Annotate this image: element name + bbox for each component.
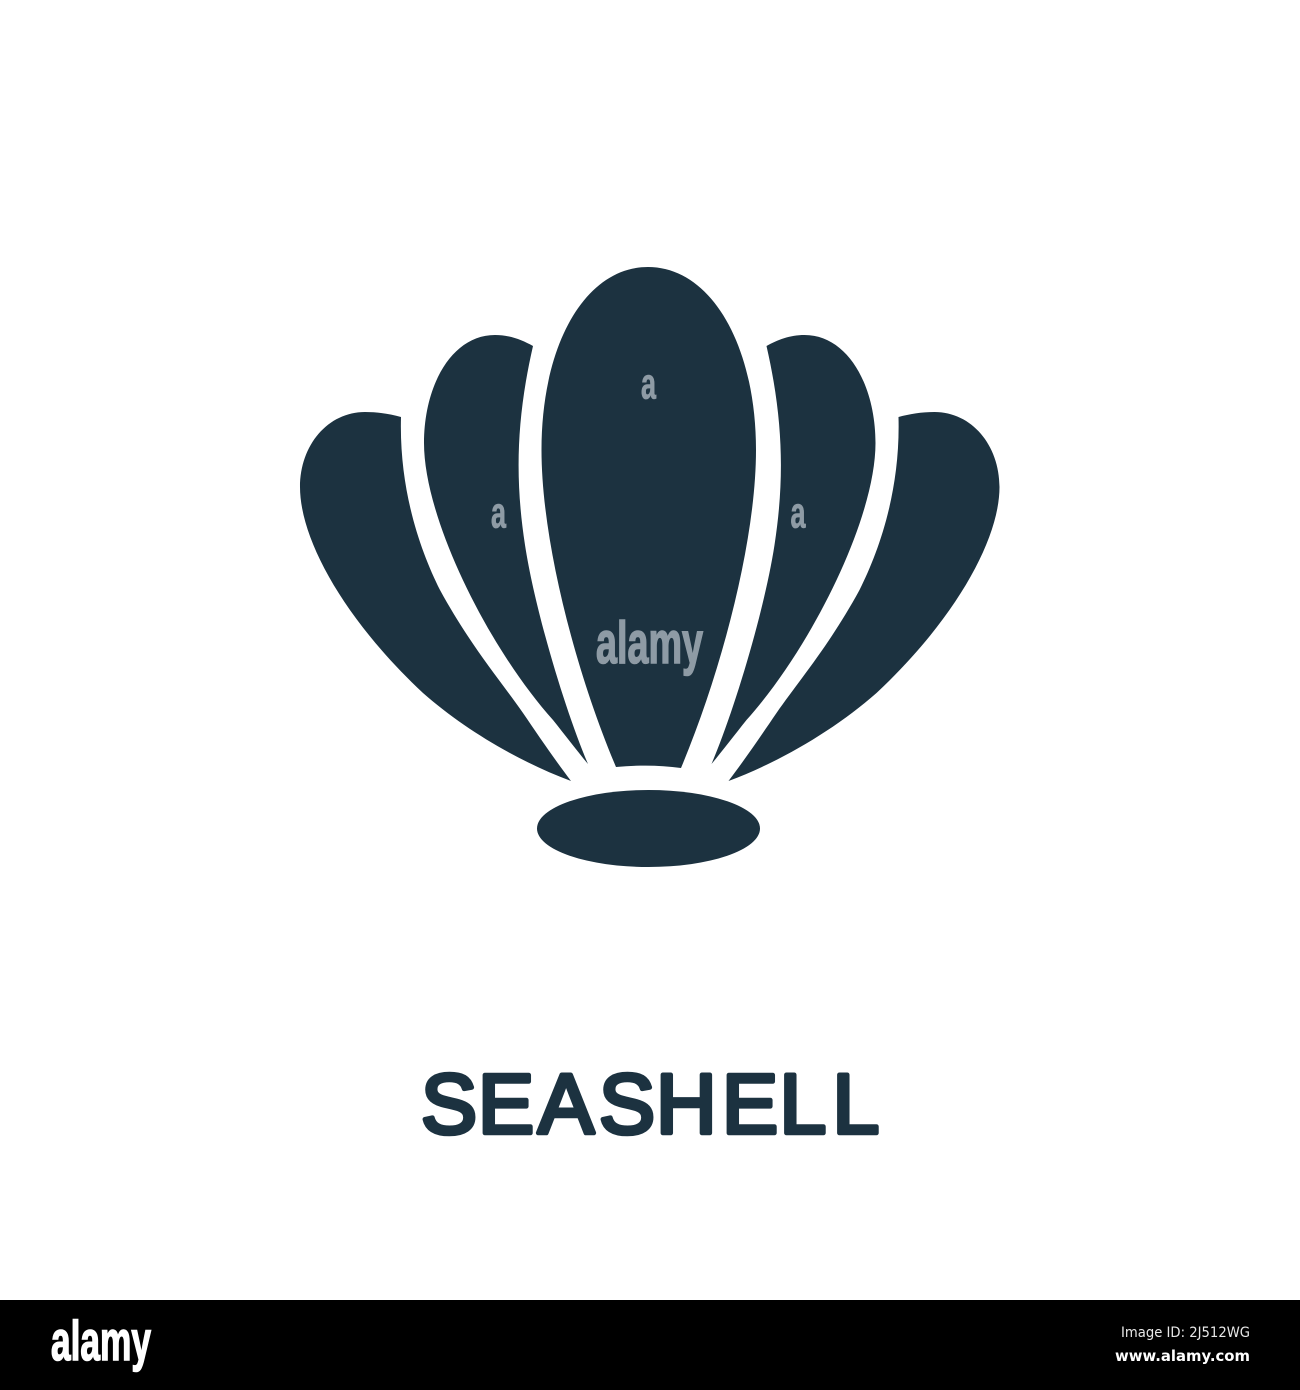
- shell base ellipse: [537, 790, 760, 867]
- watermark: small a left: a: [491, 488, 506, 538]
- title: seashell: SEASHELL: [421, 1057, 879, 1151]
- watermark: small a right: a: [790, 488, 806, 538]
- shell petal: outer right: [728, 412, 1000, 781]
- footer bar: [0, 1300, 1300, 1390]
- footer logo: alamy: alamy: [51, 1309, 151, 1372]
- shell petal: inner right: [712, 335, 876, 764]
- footer image id: Image ID: 2J512WG: [1121, 1325, 1250, 1341]
- shell petal: center: [542, 267, 756, 768]
- icon: seashell: [300, 267, 1000, 867]
- shell petal: inner left: [424, 335, 588, 764]
- footer website: www.alamy.com: [1115, 1347, 1250, 1365]
- watermark: center alamy: alamy: [596, 610, 703, 676]
- shell petal: outer left: [300, 412, 571, 781]
- watermark: small a top: a: [641, 360, 656, 408]
